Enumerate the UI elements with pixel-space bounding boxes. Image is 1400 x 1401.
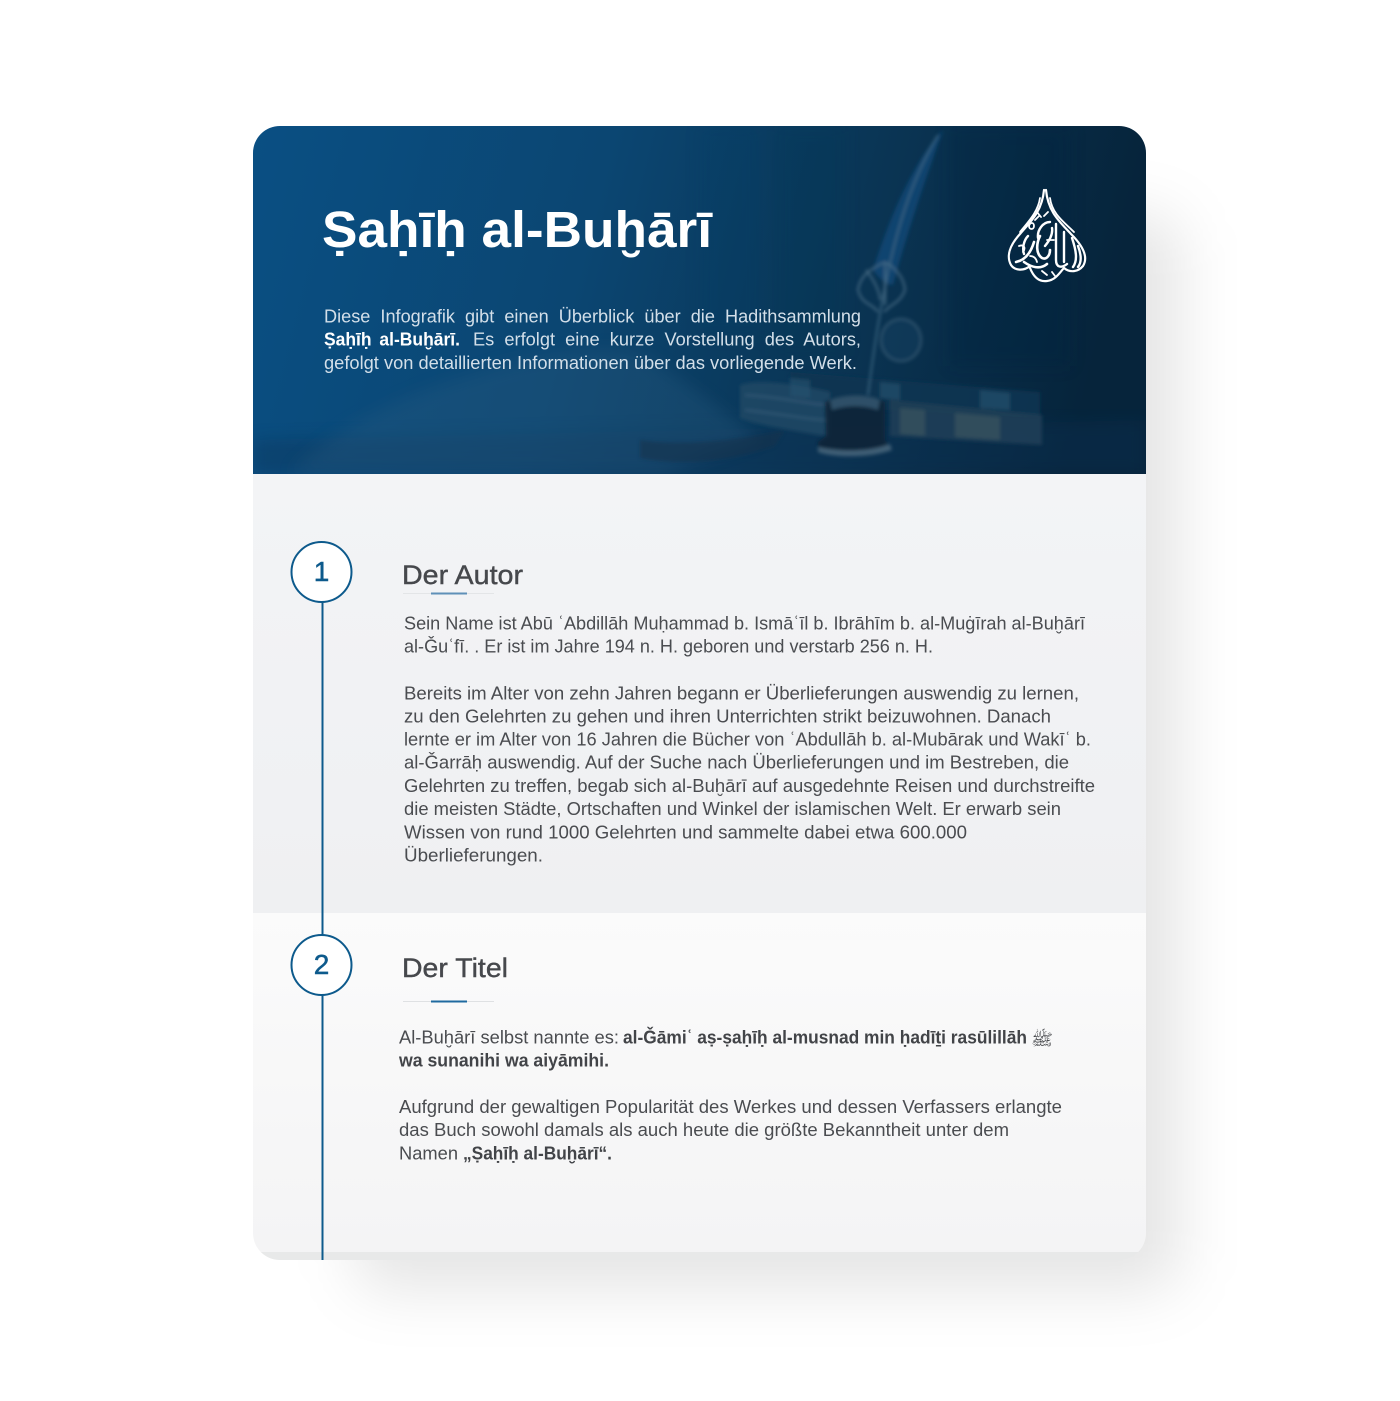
intro text: Diese Infografik gibt einen Überblick über die Hadithsammlung [324,306,861,326]
inkwell [818,396,892,456]
text block: author: Sein Name ist Abū ʿAbdillāh Muḥammad b. Ismāʿīl b. Ibrāhīm b. al-Muġīrah al-Buḫārī [404,614,1085,634]
text block: author: Bereits im Alter von zehn Jahren begann er Überlieferungen auswendig zu lernen, [404,684,1079,704]
stacked books [740,372,1042,445]
text block: title: „Ṣaḥīḥ al-Buḫārī“. [463,1144,612,1164]
text block: title: al-Ǧāmiʿ aṣ-ṣaḥīḥ al-musnad min ḥadīṯi rasūlillāh [623,1026,1027,1048]
text block: title: wa sunanihi wa aiyāmihi. [398,1050,609,1070]
text block: author: Überlieferungen. [404,846,543,866]
text block: author: lernte er im Alter von 16 Jahren die Bücher von ʿAbdullāh b. al-Mubārak und Wakīʿ b. [404,730,1091,750]
text block: author: al-Ǧuʿfī. . Er ist im Jahre 194 n. H. geboren und verstarb 256 n. H. [404,636,933,656]
intro text: Es erfolgt eine kurze Vorstellung des Autors, [473,330,861,350]
text block: author [404,614,1095,866]
open book [323,360,744,468]
text block: title [398,1026,1062,1164]
text block: title: Aufgrund der gewaltigen Popularität des Werkes und dessen Verfassers erlangte [399,1097,1062,1117]
text block: author: Wissen von rund 1000 Gelehrten und sammelte dabei etwa 600.000 [404,822,967,842]
text block: title: Al-Buḫārī selbst nannte es: [399,1028,619,1048]
card drop shadow [355,215,1180,1290]
timeline line [322,600,324,1260]
infographic card [253,126,1146,1260]
title: Ṣaḥīḥ al-Buḫārī [322,201,713,258]
heading: Der Titel: Der Titel [402,953,508,983]
magnifying glass [881,319,921,361]
icon: calligraphy logo [1009,190,1085,281]
step marker 2 [292,935,352,995]
intro text: gefolgt von detaillierten Informationen über das vorliegende Werk. [324,353,857,373]
panel: section 2 background [253,913,1146,1252]
quill feather [858,130,943,395]
text block: author: zu den Gelehrten zu gehen und ihren Unterrichten strikt beizuwohnen. Danach [404,706,1051,726]
heading: Der Autor: Der Autor [402,560,523,590]
heading underline 1 [403,592,494,594]
text block: author: die meisten Städte, Ortschaften und Winkel der islamischen Welt. Er erwarb sein [404,799,1061,819]
step marker 1: 1 [314,556,329,587]
panel: header [253,126,1146,474]
intro text: Ṣaḥīḥ al-Buḫārī. [324,330,460,350]
text block: author: Gelehrten zu treffen, begab sich al-Buḫārī auf ausgedehnte Reisen und durchstreifte [404,776,1095,796]
step marker 2: 2 [314,949,329,980]
header background photo: desk with books, quill and inkwell [253,126,1146,474]
intro text [324,306,861,373]
step marker 1 [292,542,352,602]
text block: title: das Buch sowohl damals als auch heute die größte Bekanntheit unter dem [399,1120,1009,1140]
icon: honorific: ﷺ [1031,1028,1053,1049]
text block: title: Namen [399,1144,458,1164]
heading underline 2 [403,1000,494,1002]
panel: section 1 background [253,474,1146,913]
text block: author: al-Ǧarrāḥ auswendig. Auf der Suche nach Überlieferungen und im Bestreben, die [404,752,1069,772]
card bottom edge [261,1252,368,1260]
